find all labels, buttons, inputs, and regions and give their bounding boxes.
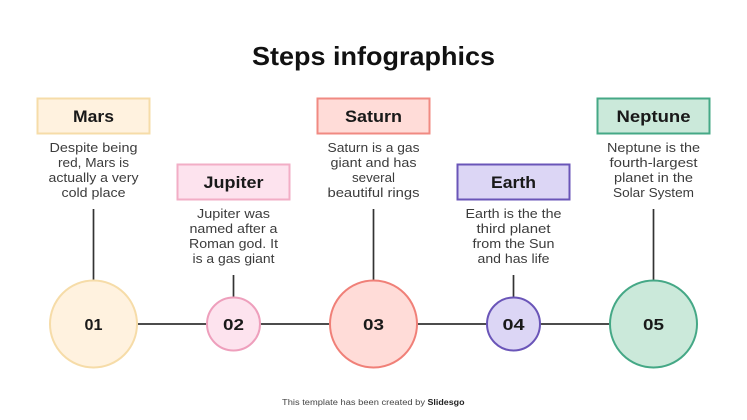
Jupiter description: Jupiter was xyxy=(197,207,270,221)
Neptune number circle 05: 05 xyxy=(643,317,664,334)
Earth description: from the Sun xyxy=(472,237,555,251)
Neptune number circle 05 xyxy=(610,280,697,368)
Saturn heading box: Saturn xyxy=(345,108,402,126)
panel: Earth step xyxy=(458,164,570,350)
Neptune heading box: Neptune xyxy=(616,108,690,126)
Earth description: third planet xyxy=(476,222,551,236)
title: Steps infographics xyxy=(252,41,495,71)
footer credit xyxy=(282,398,465,407)
Jupiter vertical connector xyxy=(232,275,234,298)
footer credit: Slidesgo xyxy=(428,398,465,407)
Earth heading box: Earth xyxy=(491,174,536,192)
Mars number circle 01: 01 xyxy=(84,317,103,334)
Jupiter number circle 02: 02 xyxy=(223,317,244,334)
Mars description: actually a very xyxy=(48,171,139,185)
Earth heading box xyxy=(458,164,570,200)
Jupiter number circle 02 xyxy=(207,298,260,350)
Jupiter description: Roman god. It xyxy=(189,237,279,251)
Earth description xyxy=(466,207,562,266)
Jupiter description xyxy=(189,207,279,266)
Mars heading box xyxy=(38,98,150,134)
Mars description: cold place xyxy=(62,186,126,200)
Neptune description: Neptune is the xyxy=(607,141,700,155)
Earth vertical connector xyxy=(512,275,514,298)
Jupiter description: is a gas giant xyxy=(192,252,275,266)
Saturn description: Saturn is a gas xyxy=(328,141,420,155)
horizontal connector line xyxy=(137,323,610,325)
Saturn number circle 03 xyxy=(330,280,417,368)
Saturn vertical connector xyxy=(372,209,374,281)
Saturn description: giant and has xyxy=(330,156,416,170)
Saturn heading box xyxy=(318,98,430,134)
Saturn description xyxy=(328,141,420,200)
Jupiter heading box: Jupiter xyxy=(204,174,264,192)
Neptune description: planet in the xyxy=(614,171,693,185)
panel: Mars step xyxy=(38,98,150,368)
Saturn number circle 03: 03 xyxy=(363,317,384,334)
Mars number circle 01 xyxy=(50,280,137,368)
Mars heading box: Mars xyxy=(73,108,114,126)
Saturn description: beautiful rings xyxy=(328,186,420,200)
panel: Neptune step xyxy=(598,98,710,368)
Earth description: Earth is the the xyxy=(466,207,562,221)
Mars description: red, Mars is xyxy=(58,156,129,170)
Neptune heading box xyxy=(598,98,710,134)
Saturn description: several xyxy=(352,171,395,185)
Mars vertical connector xyxy=(92,209,94,281)
Earth number circle 04: 04 xyxy=(502,317,525,334)
Neptune description: fourth-largest xyxy=(610,156,698,170)
panel: Saturn step xyxy=(318,98,430,368)
Neptune vertical connector xyxy=(652,209,654,281)
Mars description xyxy=(48,141,139,200)
Earth number circle 04 xyxy=(487,298,540,350)
footer credit: This template has been created by xyxy=(282,398,425,407)
Neptune description: Solar System xyxy=(613,186,694,200)
panel: Jupiter step xyxy=(178,164,290,350)
Jupiter description: named after a xyxy=(190,222,278,236)
Neptune description xyxy=(607,141,700,200)
Earth description: and has life xyxy=(478,252,550,266)
Jupiter heading box xyxy=(178,164,290,200)
Mars description: Despite being xyxy=(50,141,138,155)
